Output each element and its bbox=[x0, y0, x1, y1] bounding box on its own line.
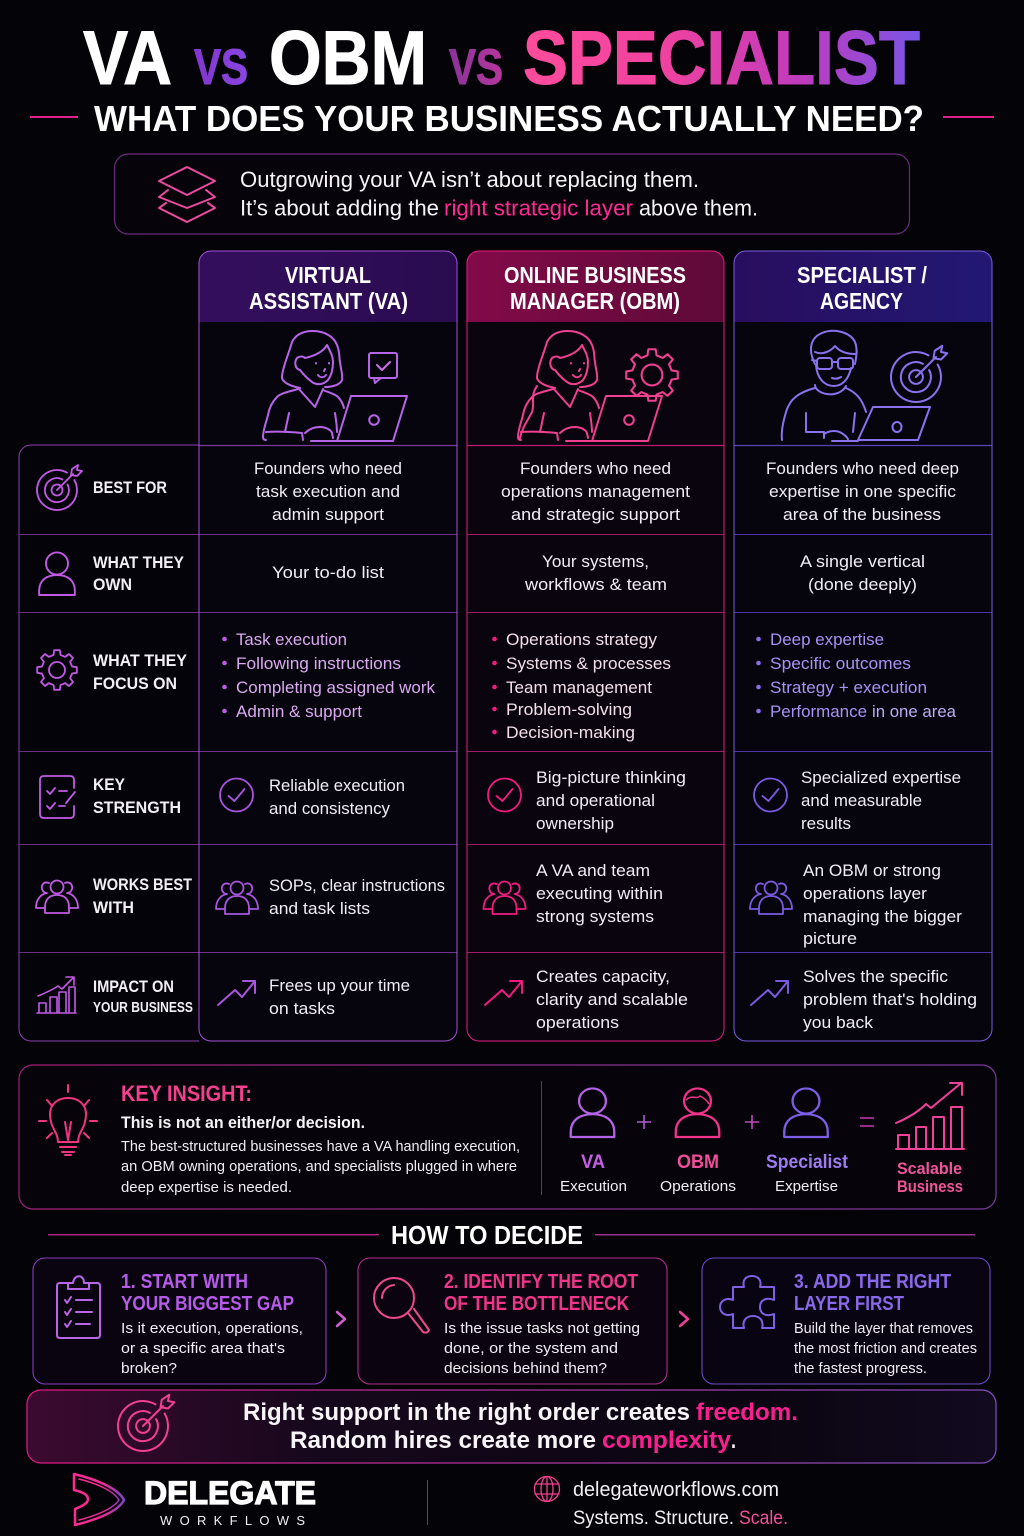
insight text bbox=[121, 1113, 520, 1196]
works best with: operations layer bbox=[803, 884, 927, 903]
impact: clarity and scalable bbox=[536, 990, 688, 1009]
best for: operations management bbox=[501, 482, 690, 501]
step 3 bbox=[702, 1258, 990, 1384]
insight text: This is not an either/or decision. bbox=[121, 1113, 365, 1132]
step 1: YOUR BIGGEST GAP bbox=[121, 1293, 294, 1315]
key strength bbox=[536, 768, 686, 833]
what they own bbox=[524, 552, 667, 594]
intro callout: Outgrowing your VA isn’t about replacing them. bbox=[240, 167, 699, 192]
focus list: Strategy + execution bbox=[770, 678, 927, 697]
impact bbox=[536, 967, 688, 1032]
header: AGENCY bbox=[820, 288, 903, 314]
icon: light bulb bbox=[39, 1085, 97, 1155]
VA role: Execution bbox=[560, 1178, 627, 1195]
icon: check bbox=[488, 778, 521, 812]
focus list: Task execution bbox=[236, 630, 347, 649]
icon: team bbox=[484, 882, 526, 914]
best for: task execution and bbox=[256, 482, 400, 501]
icon: bars bbox=[37, 977, 76, 1013]
best for: expertise in one specific bbox=[769, 482, 957, 501]
closing banner: Right support in the right order creates bbox=[243, 1399, 690, 1426]
works best with: SOPs, clear instructions bbox=[269, 876, 445, 895]
icon: team bbox=[750, 882, 792, 914]
best for bbox=[766, 459, 959, 524]
step 2: 2. IDENTIFY THE ROOT bbox=[444, 1271, 638, 1293]
impact: you back bbox=[803, 1013, 874, 1032]
closing banner: . bbox=[731, 1427, 736, 1454]
label: impact bbox=[93, 978, 193, 1016]
closing banner bbox=[27, 1390, 996, 1463]
icon: team bbox=[36, 880, 78, 913]
step 1: broken? bbox=[121, 1360, 177, 1377]
label: best for: BEST FOR bbox=[93, 479, 167, 497]
works best with: A VA and team bbox=[536, 861, 650, 880]
contact info: Systems. Structure. bbox=[573, 1508, 734, 1529]
impact bbox=[803, 967, 977, 1032]
header: ONLINE BUSINESS bbox=[504, 262, 686, 288]
icon: trend arrow bbox=[485, 981, 522, 1005]
label: focus: FOCUS ON bbox=[93, 675, 177, 693]
illustration: woman with gear bbox=[518, 331, 678, 441]
VA role: VA bbox=[581, 1152, 605, 1173]
icon: check bbox=[754, 778, 787, 812]
key strength: and measurable bbox=[801, 791, 922, 810]
focus list: Systems & processes bbox=[506, 654, 671, 673]
icon: check bbox=[220, 778, 253, 812]
label: works best with: WITH bbox=[93, 899, 134, 917]
works best with: managing the bigger bbox=[803, 907, 962, 926]
works best with: and task lists bbox=[269, 899, 370, 918]
header: VIRTUAL bbox=[285, 262, 371, 288]
title: VS bbox=[194, 39, 248, 95]
contact info: Scale. bbox=[739, 1508, 788, 1529]
best for: Founders who need bbox=[520, 459, 671, 478]
OBM role: Operations bbox=[660, 1178, 736, 1195]
scalable business: Business bbox=[897, 1177, 963, 1196]
focus list bbox=[756, 630, 957, 721]
best for bbox=[254, 459, 402, 524]
focus list bbox=[492, 630, 671, 742]
what they own: A single vertical bbox=[800, 552, 925, 571]
title bbox=[83, 16, 920, 101]
key strength: ownership bbox=[536, 814, 614, 833]
scalable business bbox=[896, 1083, 964, 1196]
logo: Delegate Workflows: WORKFLOWS bbox=[160, 1513, 305, 1528]
step 3: LAYER FIRST bbox=[794, 1293, 904, 1315]
title: OBM bbox=[269, 16, 427, 101]
title: VS bbox=[449, 39, 503, 95]
insight heading: KEY INSIGHT: bbox=[121, 1081, 252, 1106]
plus bbox=[637, 1115, 651, 1129]
panel: VA column bbox=[199, 251, 457, 1041]
icon: puzzle bbox=[720, 1276, 774, 1328]
key strength bbox=[801, 768, 961, 833]
title: SPECIALIST bbox=[523, 16, 920, 101]
best for: Founders who need bbox=[254, 459, 402, 478]
illustration: man with target bbox=[782, 331, 947, 441]
icon: team bbox=[216, 882, 258, 914]
impact: on tasks bbox=[269, 999, 335, 1018]
subtitle: WHAT DOES YOUR BUSINESS ACTUALLY NEED? bbox=[94, 98, 924, 139]
panel: row labels bbox=[19, 445, 199, 1041]
best for: and strategic support bbox=[511, 505, 680, 524]
works best with bbox=[269, 876, 445, 918]
step 2 bbox=[358, 1258, 667, 1384]
label: impact: IMPACT ON bbox=[93, 978, 174, 996]
best for: Founders who need deep bbox=[766, 459, 959, 478]
insight text: The best-structured businesses have a VA handling execution, bbox=[121, 1138, 520, 1155]
icon: gear bbox=[37, 650, 77, 690]
works best with: picture bbox=[803, 929, 857, 948]
icon: target bbox=[37, 465, 82, 510]
key strength: Reliable execution bbox=[269, 776, 405, 795]
insight text: an OBM owning operations, and specialists plugged in where bbox=[121, 1158, 517, 1175]
step 3: Build the layer that removes bbox=[794, 1320, 973, 1337]
label: focus bbox=[93, 652, 187, 693]
OBM role bbox=[660, 1088, 736, 1195]
plus bbox=[745, 1115, 759, 1129]
focus list: Deep expertise bbox=[770, 630, 884, 649]
works best with bbox=[536, 861, 663, 926]
label: what they own bbox=[93, 554, 184, 594]
intro callout: right strategic layer bbox=[444, 196, 633, 220]
insight text: deep expertise is needed. bbox=[121, 1179, 292, 1196]
best for bbox=[501, 459, 690, 524]
what they own bbox=[800, 552, 925, 594]
what they own: Your systems, bbox=[542, 552, 649, 571]
logo: Delegate Workflows bbox=[74, 1474, 316, 1528]
Specialist role: Specialist bbox=[766, 1152, 849, 1173]
impact: Solves the specific bbox=[803, 967, 949, 986]
label: works best with bbox=[93, 876, 192, 917]
key strength: and consistency bbox=[269, 799, 390, 818]
focus list: Admin & support bbox=[236, 702, 362, 721]
step 1: or a specific area that's bbox=[121, 1340, 285, 1357]
closing banner: complexity bbox=[602, 1427, 732, 1454]
best for: admin support bbox=[272, 505, 384, 524]
key strength bbox=[269, 776, 405, 818]
closing banner: freedom. bbox=[696, 1399, 798, 1426]
impact: Creates capacity, bbox=[536, 967, 670, 986]
step 3: the fastest progress. bbox=[794, 1360, 927, 1377]
arrow bbox=[337, 1312, 345, 1326]
logo: Delegate Workflows: DELEGATE bbox=[144, 1475, 316, 1511]
focus list: Specific outcomes bbox=[770, 654, 911, 673]
Specialist role bbox=[766, 1088, 849, 1195]
focus list bbox=[222, 630, 435, 721]
icon: layers bbox=[159, 167, 215, 222]
focus list: Following instructions bbox=[236, 654, 401, 673]
icon: magnifier bbox=[374, 1278, 429, 1333]
illustration: woman at laptop bbox=[263, 331, 407, 441]
step 2: OF THE BOTTLENECK bbox=[444, 1293, 629, 1315]
focus list: Completing assigned work bbox=[236, 678, 435, 697]
icon: clipboard bbox=[57, 1276, 100, 1338]
header: ASSISTANT (VA) bbox=[249, 288, 408, 314]
step 1 bbox=[33, 1258, 326, 1384]
header bbox=[249, 262, 408, 314]
focus list: Performance bbox=[770, 702, 867, 721]
what they own: Your to-do list bbox=[272, 563, 384, 582]
icon: target bbox=[118, 1395, 174, 1451]
label: focus: WHAT THEY bbox=[93, 652, 187, 670]
equals bbox=[860, 1118, 874, 1126]
icon: checklist bbox=[40, 776, 75, 818]
panel: Specialist column bbox=[734, 251, 992, 1041]
works best with: strong systems bbox=[536, 907, 654, 926]
header: MANAGER (OBM) bbox=[510, 288, 680, 314]
icon: globe bbox=[534, 1476, 560, 1502]
arrow bbox=[680, 1312, 688, 1326]
title: VA bbox=[83, 16, 172, 101]
label: what they own: OWN bbox=[93, 576, 132, 594]
intro callout: It’s about adding the bbox=[240, 196, 439, 220]
intro callout bbox=[114, 154, 910, 234]
step 1: 1. START WITH bbox=[121, 1271, 248, 1293]
scalable business: Scalable bbox=[897, 1159, 962, 1178]
works best with: An OBM or strong bbox=[803, 861, 941, 880]
label: works best with: WORKS BEST bbox=[93, 876, 192, 894]
impact bbox=[269, 976, 410, 1018]
header: SPECIALIST / bbox=[797, 262, 928, 288]
works best with bbox=[803, 861, 962, 948]
OBM role: OBM bbox=[677, 1152, 719, 1173]
step 3: 3. ADD THE RIGHT bbox=[794, 1271, 951, 1293]
label: what they own: WHAT THEY bbox=[93, 554, 184, 572]
focus list: in one area bbox=[872, 702, 957, 721]
impact: operations bbox=[536, 1013, 619, 1032]
key strength: Specialized expertise bbox=[801, 768, 961, 787]
icon: person bbox=[39, 552, 75, 595]
step 2: done, or the system and bbox=[444, 1340, 618, 1357]
focus list: Decision-making bbox=[506, 723, 635, 742]
VA role bbox=[560, 1088, 627, 1195]
key strength: results bbox=[801, 814, 851, 833]
closing banner: Random hires create more bbox=[290, 1427, 596, 1454]
step 2: decisions behind them? bbox=[444, 1360, 607, 1377]
label: key strength bbox=[93, 776, 181, 817]
best for: area of the business bbox=[783, 505, 941, 524]
contact info bbox=[534, 1476, 788, 1529]
Specialist role: Expertise bbox=[775, 1178, 838, 1195]
heading: how to decide: HOW TO DECIDE bbox=[391, 1220, 583, 1250]
icon: trend arrow bbox=[751, 981, 788, 1005]
key strength: and operational bbox=[536, 791, 655, 810]
header bbox=[797, 262, 928, 314]
key strength: Big-picture thinking bbox=[536, 768, 686, 787]
focus list: Operations strategy bbox=[506, 630, 658, 649]
focus list: Team management bbox=[506, 678, 652, 697]
contact info: delegateworkflows.com bbox=[573, 1479, 779, 1501]
label: key strength: KEY bbox=[93, 776, 125, 794]
works best with: executing within bbox=[536, 884, 663, 903]
label: key strength: STRENGTH bbox=[93, 799, 181, 817]
step 3: the most friction and creates bbox=[794, 1340, 977, 1357]
panel: key insight bbox=[19, 1065, 996, 1209]
icon: trend arrow bbox=[218, 981, 255, 1005]
what they own: workflows & team bbox=[524, 575, 667, 594]
panel: OBM column bbox=[467, 251, 724, 1041]
impact: Frees up your time bbox=[269, 976, 410, 995]
step 1: Is it execution, operations, bbox=[121, 1320, 303, 1337]
impact: problem that's holding bbox=[803, 990, 977, 1009]
header bbox=[504, 262, 686, 314]
label: impact: YOUR BUSINESS bbox=[93, 1000, 193, 1016]
step 2: Is the issue tasks not getting bbox=[444, 1320, 640, 1337]
what they own: (done deeply) bbox=[808, 575, 917, 594]
intro callout: above them. bbox=[639, 196, 758, 220]
focus list: Problem-solving bbox=[506, 700, 632, 719]
